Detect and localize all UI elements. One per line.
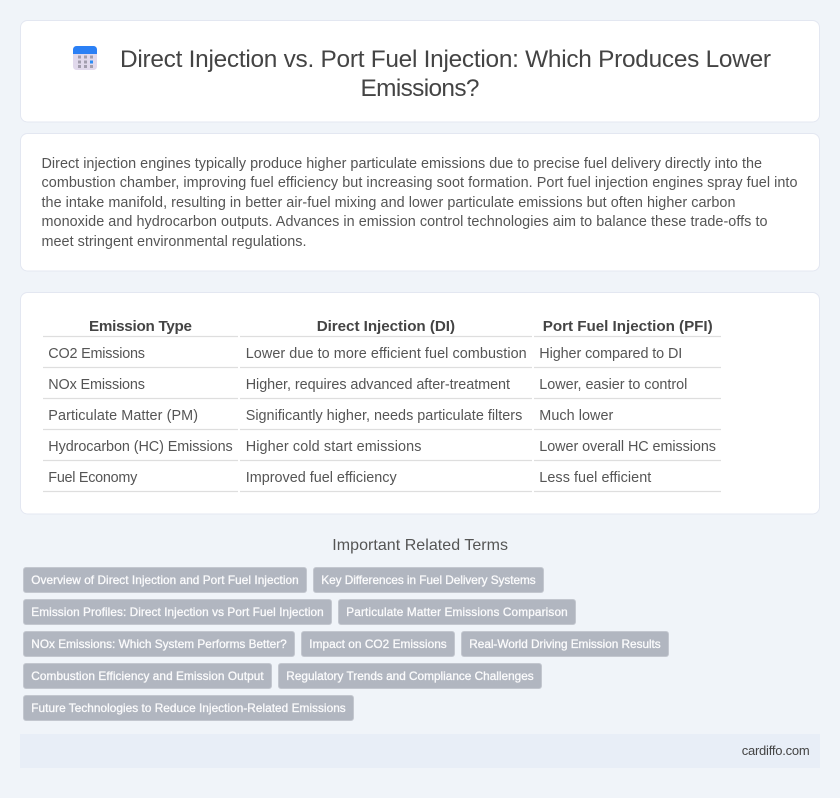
table row: NOx emissions: Lower, easier to control bbox=[539, 377, 687, 393]
table row: NOx emissions bbox=[48, 377, 687, 393]
table header: Direct Injection (DI) bbox=[317, 318, 455, 335]
chip bbox=[338, 600, 576, 624]
chip: Emission Profiles: Direct Injection vs Port Fuel Injection bbox=[31, 605, 324, 619]
icon: calendar bbox=[73, 46, 97, 70]
text block: summary paragraph: the intake manifold, resulting in better air-fuel mixing and lower particulate emissions but often higher carbon bbox=[42, 195, 736, 211]
panel: description bbox=[20, 134, 820, 271]
chip: Impact on CO2 Emissions bbox=[309, 637, 447, 651]
chip bbox=[462, 632, 668, 656]
chip: NOx Emissions: Which System Performs Better? bbox=[31, 637, 287, 651]
title: Direct Injection vs. Port Fuel Injection: Which Produces Lower bbox=[120, 46, 771, 73]
chip bbox=[24, 696, 354, 720]
title: Emissions? bbox=[360, 75, 480, 102]
table row: NOx emissions: NOx Emissions bbox=[48, 377, 145, 393]
table row: particulate matter: Particulate Matter (PM) bbox=[48, 408, 198, 424]
panel: title card bbox=[20, 20, 820, 122]
chip: Particulate Matter Emissions Comparison bbox=[346, 605, 568, 619]
chip bbox=[314, 568, 544, 592]
chip bbox=[24, 664, 272, 688]
table row: particulate matter: Much lower bbox=[539, 408, 614, 424]
table header: Port Fuel Injection (PFI) bbox=[543, 318, 713, 335]
table header: Emission Type bbox=[89, 318, 192, 335]
table row: hydrocarbon emissions: Hydrocarbon (HC) Emissions bbox=[48, 439, 233, 455]
footer bbox=[20, 734, 820, 768]
chip bbox=[24, 632, 294, 656]
panel: related term chips bbox=[24, 568, 668, 720]
table row: particulate matter bbox=[48, 408, 614, 424]
panel: comparison table bbox=[20, 292, 820, 514]
footer: cardiffo.com bbox=[742, 743, 810, 758]
table row: particulate matter: Significantly higher, needs particulate filters bbox=[246, 408, 522, 424]
table row: fuel economy bbox=[48, 470, 651, 486]
chip: Combustion Efficiency and Emission Output bbox=[31, 669, 264, 683]
text block: summary paragraph bbox=[42, 156, 798, 250]
chip bbox=[24, 600, 332, 624]
table row: hydrocarbon emissions: Lower overall HC emissions bbox=[539, 439, 716, 455]
chip: Real-World Driving Emission Results bbox=[469, 637, 661, 651]
table row: CO2 emissions bbox=[48, 346, 682, 362]
heading: related terms: Important Related Terms bbox=[332, 537, 508, 554]
chip bbox=[278, 664, 542, 688]
text block: summary paragraph: Direct injection engines typically produce higher particulate emissions due to precise fuel delivery directly into the bbox=[42, 156, 762, 172]
table row: hydrocarbon emissions bbox=[48, 439, 716, 455]
text block: summary paragraph: monoxide and hydrocarbon outputs. Advances in emission control technologies aim to balance these trade-offs to bbox=[42, 214, 768, 230]
text block: summary paragraph: meet stringent environmental regulations. bbox=[42, 234, 306, 250]
table row: fuel economy: Fuel Economy bbox=[48, 470, 138, 486]
chip bbox=[302, 632, 454, 656]
text block: summary paragraph: combustion chamber, improving fuel efficiency but increasing soot formation. Port fuel injection engines spray fuel into bbox=[42, 175, 798, 191]
table row: hydrocarbon emissions: Higher cold start emissions bbox=[246, 439, 422, 455]
table row: CO2 emissions: Lower due to more efficient fuel combustion bbox=[246, 346, 527, 362]
chip: Regulatory Trends and Compliance Challenges bbox=[286, 669, 534, 683]
table header bbox=[89, 318, 713, 335]
table row: CO2 emissions: Higher compared to DI bbox=[539, 346, 682, 362]
table row: fuel economy: Improved fuel efficiency bbox=[246, 470, 397, 486]
title bbox=[120, 46, 771, 102]
chip bbox=[24, 568, 306, 592]
chip: Key Differences in Fuel Delivery Systems bbox=[321, 573, 536, 587]
chip: Future Technologies to Reduce Injection-Related Emissions bbox=[31, 701, 346, 715]
table row: CO2 emissions: CO2 Emissions bbox=[48, 346, 145, 362]
table row: NOx emissions: Higher, requires advanced after-treatment bbox=[246, 377, 510, 393]
chip: Overview of Direct Injection and Port Fuel Injection bbox=[31, 573, 299, 587]
table row: fuel economy: Less fuel efficient bbox=[539, 470, 651, 486]
